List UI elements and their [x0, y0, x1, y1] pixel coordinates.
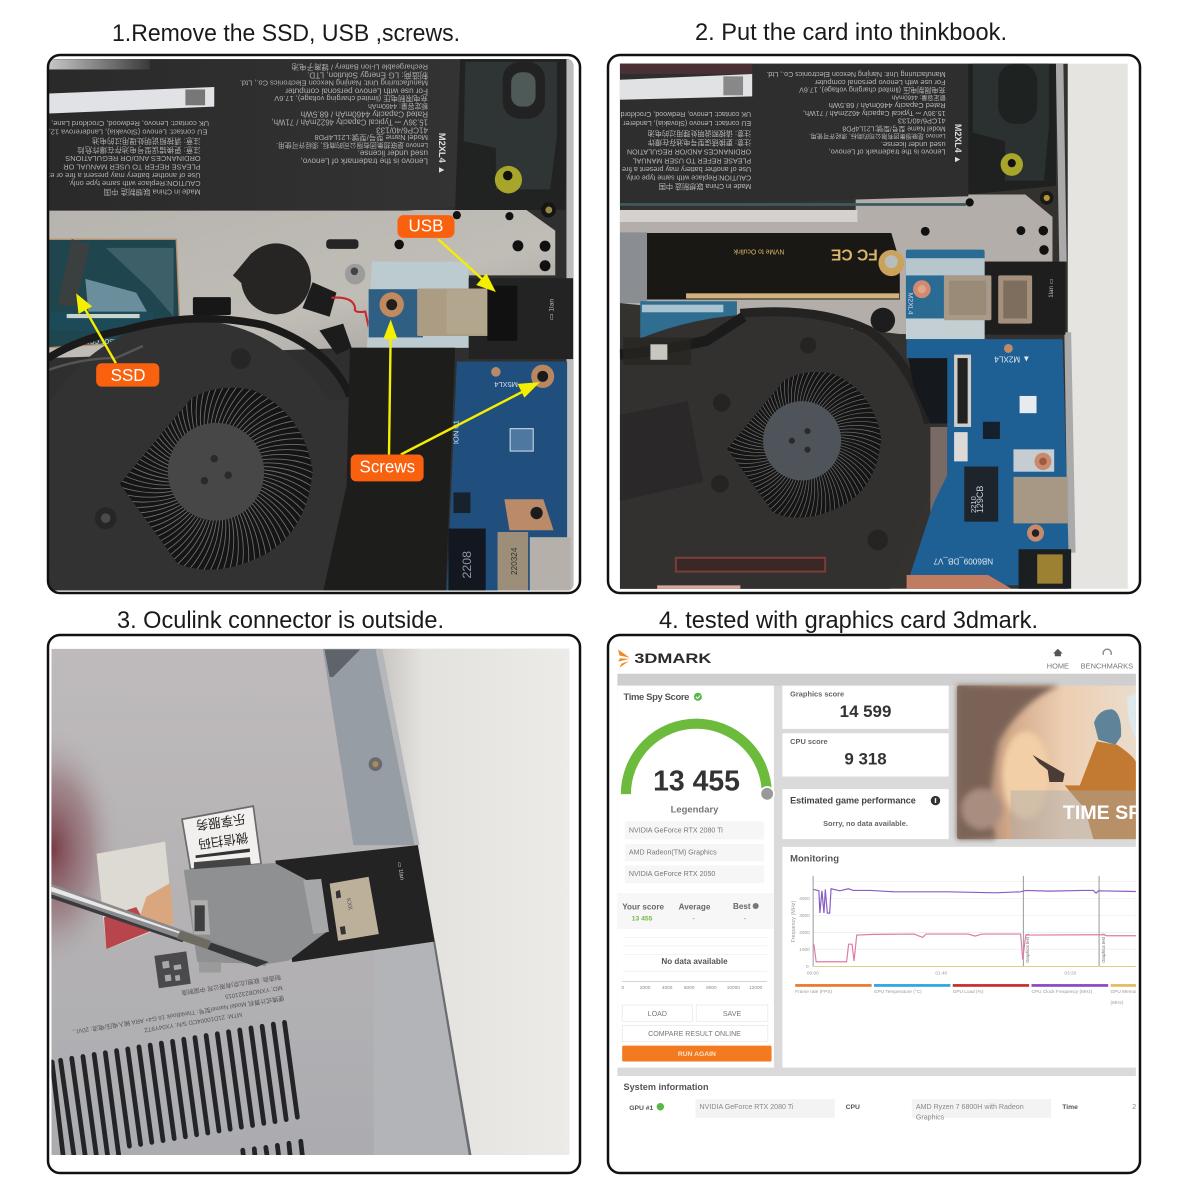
battery pack: 15.36V ⎓ Typical Capacity 4622mAh / 71Wh,: [271, 117, 428, 126]
regulatory text upside down: MTM: 21D10004CD S/N: YX04Y9TZ: [143, 1010, 243, 1033]
axis labels: 00:00: [807, 970, 819, 976]
yellow baseline: [813, 965, 1136, 968]
legend labels: [795, 989, 1177, 1006]
laptop bottom cover: [51, 649, 570, 1155]
battery pack: PLEASE REFER TO USER MANUAL OR: [63, 163, 201, 172]
blue motherboard: ION 01: [452, 420, 461, 444]
panel border: step 1: [48, 55, 580, 593]
battery: EU contact: Lenovo (Slovakia), Landerer: [623, 119, 751, 127]
image: Time Spy artwork: TIME SPY: [1063, 802, 1154, 824]
fan blades: [727, 372, 882, 518]
battery pack: UK contact: Lenovo, Redwood, Crockford Lane, Basingstoke: [8, 119, 209, 128]
battery pack: Use of another battery may present a fire or explosion: [23, 171, 201, 180]
callout: USB: [397, 215, 454, 238]
legend bars: [795, 984, 1138, 987]
nav: home: HOME: [1047, 662, 1069, 671]
battery: Model Name 型号/型號:L21L4PD8: [842, 124, 946, 133]
GPU comparison rows: NVIDIA GeForce RTX 2050: [629, 870, 715, 878]
your score row: -: [744, 916, 746, 923]
button: save: [696, 1005, 768, 1021]
blue motherboard: 129CB: [975, 486, 985, 513]
system information: GPU #1: [629, 1105, 654, 1112]
button: load: LOAD: [648, 1010, 667, 1018]
black flex tail and opening: [275, 845, 435, 962]
battery: used under license.: [881, 140, 946, 149]
axis labels: 4000: [799, 896, 810, 902]
system information: Graphics: [916, 1113, 945, 1121]
button: load: [622, 1005, 692, 1021]
screwdriver: [51, 884, 269, 967]
battery: PLEASE REFER TO USER MANUAL: [633, 156, 751, 164]
battery: 15.36V ⎓ Typical Capacity 4622mAh / 71Wh,: [803, 109, 946, 117]
battery: Lenovo is the trademark of Lenovo,: [829, 148, 946, 157]
CPU clock line: [813, 889, 1136, 913]
page background band: [617, 674, 1136, 1076]
regulatory text upside down: [67, 973, 286, 1045]
battery pack: used under license.: [358, 148, 428, 157]
battery pack: 注意: 更换错误型号电池存在爆炸危险: [77, 145, 201, 155]
legend labels: CPU Clock Frequency (MHz): [1031, 989, 1093, 995]
card: estimated game performance: [782, 789, 949, 839]
small daughter board with USB connector: ▭ 1lan: [549, 299, 556, 320]
ribbon cable: [908, 358, 948, 424]
teal cable board under M.2: [640, 301, 737, 339]
battery pack: 额定容量: 4460mAh: [368, 102, 428, 111]
card: monitoring chart: Graphics test 2: [1101, 933, 1106, 963]
card: Time Spy score: [617, 686, 774, 1068]
callout arrows, yellow: [76, 239, 540, 455]
card: CPU score: CPU score: [790, 737, 828, 746]
3DMark logo: 3DMARK: [634, 651, 712, 667]
blue motherboard: 2210: [969, 496, 978, 513]
black flex tail and opening: ▭ 1lan: [396, 862, 405, 881]
panel border: step 3: [48, 635, 580, 1173]
battery pack: EU contact: Lenovo (Slovakia), Landererova 12, Bratislava: [13, 128, 207, 137]
blue motherboard: M5XL4: [494, 380, 518, 389]
marker lines: [813, 876, 1099, 967]
battery: Made in China 联想制造 中国: [659, 182, 751, 191]
score distribution, no data: [622, 937, 767, 991]
system information: [610, 1076, 1136, 1127]
battery: [620, 64, 968, 207]
battery: Lenovo 是联想集团有限公司的商标, 须经许可使用.: [809, 132, 946, 140]
M.2 slot area, teal board: Sensor conn: [80, 337, 129, 347]
battery pack: Made in China 联想制造 中国: [104, 187, 201, 197]
battery: 注意: 更换错误型号电池存在爆炸: [648, 138, 751, 147]
your score row: [617, 893, 774, 929]
battery pack: ORDINANCES AND/OR REGULATIONS: [65, 154, 201, 163]
M.2 adapter card with gold markings: FC CE: [831, 246, 878, 263]
legend labels: GPU Memory Clock Frequency: [1111, 989, 1177, 995]
title: step 1: 1.Remove the SSD, USB ,screws.: [112, 20, 460, 47]
panel: step 2 photo, card installed in laptop: [608, 55, 1140, 593]
card: graphics score: Graphics score: [790, 689, 844, 698]
battery pack: [8, 59, 460, 211]
blue motherboard: [447, 362, 571, 594]
your score row: Average: [679, 902, 711, 911]
coin cell battery: [193, 243, 369, 327]
your score row: -: [693, 916, 695, 923]
axis labels: [791, 896, 1077, 976]
system information: 2: [1132, 1103, 1136, 1111]
blue motherboard: 220324: [510, 547, 519, 575]
QR sticker with Chinese text: 微信扫码: [197, 830, 249, 851]
overlay band: [1011, 790, 1136, 839]
GPU comparison rows: NVIDIA GeForce RTX 2080 Ti: [629, 827, 723, 835]
battery: 41CP6/40/133: [898, 117, 946, 126]
chassis screw: [369, 757, 382, 771]
battery: For use with Lenovo personal computer: [814, 78, 946, 87]
Oculink connector: [330, 877, 379, 941]
nav: benchmarks: BENCHMARKS: [1081, 662, 1133, 671]
M.2 adapter card with gold markings: NVMe to Oculink: [733, 248, 784, 255]
plate screw holes: [394, 211, 551, 271]
axis labels: 1000: [799, 947, 810, 953]
character: [1065, 741, 1136, 839]
battery pack: Lenovo 是联想集团有限公司的商标, 须经许可使用.: [276, 141, 428, 150]
callout: SSD: [96, 363, 159, 387]
daughter board: [906, 250, 991, 339]
battery pack: Manufacturing Unit: Nanjing Nexcon Electronics Co., Ltd.: [240, 78, 428, 88]
battery: Use of another battery may present a fire: [622, 165, 751, 173]
your score row: Best: [733, 902, 751, 911]
battery: 额定容量: 4460mAh: [891, 93, 946, 101]
battery pack: CAUTION:Replace with same type only.: [69, 179, 201, 188]
axis labels: 0: [806, 964, 809, 970]
battery pack: For use with Lenovo personal computer: [285, 86, 428, 95]
blue motherboard: 2208: [460, 551, 474, 578]
battery pack: 41CP6/40/133: [376, 125, 428, 134]
battery: Manufacturing Unit: Nanjing Nexcon Electronics Co., Ltd.: [766, 70, 946, 78]
blue motherboard: NB6009_DB_V7: [933, 556, 993, 566]
GPU clock line: [814, 934, 1136, 962]
panel: step 1 photo, laptop interior with callouts: [49, 59, 574, 590]
score distribution, no data: 2000: [640, 985, 651, 991]
fan housing: [620, 300, 943, 592]
M.2 slot area, teal board: [48, 239, 180, 348]
panel border: step 2: [608, 55, 1140, 593]
small daughter board with USB connector: [367, 262, 573, 359]
system information: System information: [624, 1082, 709, 1092]
your score row: 13 455: [632, 916, 653, 923]
battery pack: Lenovo is the trademark of Lenovo,: [301, 156, 428, 165]
card: monitoring chart: [782, 847, 1177, 1068]
title: step 3: 3. Oculink connector is outside.: [117, 607, 444, 634]
QR sticker with Chinese text: 乐享服务: [194, 811, 246, 833]
battery: M2XL4 ▲: [953, 124, 963, 164]
card: graphics score: [782, 686, 949, 729]
grid: [813, 882, 1136, 949]
battery pack: Rated Capacity 4460mAh / 68.5Wh: [300, 109, 428, 119]
metal chassis plate: [48, 210, 555, 358]
button: compare: COMPARE RESULT ONLINE: [648, 1030, 741, 1038]
callout: Screws: [351, 455, 424, 481]
battery pack: Rechargeable Li-Ion Battery / 锂离子电池: [291, 63, 428, 73]
image: Time Spy artwork: [957, 686, 1154, 839]
fan housing: [49, 315, 352, 570]
system information: NVIDIA GeForce RTX 2080 Ti: [700, 1103, 794, 1111]
regulatory text upside down: 便携式计算机 Model Name/型号: ThinkBook 16 G4+ ARA 输入电压/电流: 20V/...: [71, 994, 285, 1036]
blue motherboard: [907, 339, 1071, 589]
battery: 充电限制电压 (limited charging voltage), 17.6V: [799, 85, 946, 94]
legend labels: GPU Temperature (°C): [874, 989, 922, 995]
score gauge: [626, 724, 774, 801]
holographic sticker: [97, 842, 174, 949]
score distribution, no data: No data available: [661, 957, 728, 966]
photo area: [620, 64, 1128, 592]
speaker: [455, 58, 569, 218]
laptop right edge: [1056, 64, 1067, 262]
cooling vents: [52, 1022, 302, 1157]
system information: AMD Ryzen 7 6800H with Radeon: [916, 1103, 1024, 1111]
axis labels: 01:40: [935, 970, 948, 976]
title: step 2: 2. Put the card into thinkbook.: [695, 19, 1007, 46]
card: Time Spy score: Time Spy Score: [624, 692, 689, 703]
card: Time Spy score: Legendary: [671, 805, 719, 816]
black flex section: [985, 262, 1065, 335]
score distribution, no data: 10000: [727, 985, 740, 991]
Oculink connector: KXK: [345, 898, 354, 912]
QR sticker with Chinese text: [182, 806, 261, 869]
system information: Time: [1062, 1104, 1078, 1111]
score distribution, no data: 0: [622, 985, 625, 991]
score distribution, no data: 6000: [684, 985, 695, 991]
battery: Rated Capacity 4460mAh / 68.5Wh: [829, 101, 946, 110]
panel: step 3 photo, Oculink connector outside the case: [51, 648, 570, 1155]
axis labels: Frequency (MHz): [791, 901, 797, 943]
battery pack: 制造商: LG Energy Solution, LTD.: [307, 71, 428, 81]
battery: CAUTION:Replace with same type only.: [625, 174, 751, 182]
legend labels: (MHz): [1111, 1000, 1124, 1006]
card: graphics score: 14 599: [840, 702, 891, 721]
grey plastic bracket: [184, 863, 329, 973]
button: compare: [622, 1025, 768, 1042]
speaker grille dots: [325, 649, 360, 677]
battery: UK contact: Lenovo, Redwood, Crockford: [620, 110, 751, 118]
second oculink connector: [998, 275, 1032, 324]
axis labels: 3000: [799, 913, 810, 919]
callout: Screws: Screws: [360, 457, 415, 476]
battery pack: 注意: 请按照说明处理用过的电池: [92, 136, 201, 146]
GPU comparison rows: AMD Radeon(TM) Graphics: [629, 849, 717, 857]
title: step 4: 4. tested with graphics card 3dmark.: [659, 607, 1038, 634]
card: estimated game performance: Estimated game performance: [790, 796, 916, 806]
metal plate: [620, 194, 1052, 334]
your score row: Your score: [622, 902, 664, 911]
speaker: [968, 64, 1056, 205]
legend labels: GPU Load (%): [953, 989, 984, 995]
button: run again: RUN AGAIN: [678, 1051, 716, 1058]
legend labels: Frame rate (FPS): [795, 989, 832, 995]
system information: CPU: [846, 1104, 860, 1111]
laptop side strip: [323, 649, 418, 845]
fan blades: [120, 388, 312, 570]
battery pack: Model Name 型号/型號:L21L4PD8: [314, 133, 428, 143]
battery: ORDINANCES AND/OR REGULATION: [627, 148, 751, 156]
callout: USB: USB: [409, 216, 443, 235]
regulatory text upside down: MO: YXNOB2321015: [224, 984, 283, 1000]
panel border: step 4: [608, 635, 1140, 1173]
nav: home: [1047, 649, 1069, 671]
button: save: SAVE: [723, 1010, 741, 1018]
laptop edge strip: [566, 55, 574, 593]
black insulating film: [323, 348, 455, 593]
QR code: [154, 951, 191, 988]
button: run again: [622, 1046, 772, 1061]
battery: 注意: 请按照说明处理用过的电池: [648, 129, 751, 138]
photo area: 1lan ▭: [1048, 278, 1055, 298]
callout: SSD: SSD: [111, 366, 146, 385]
score distribution, no data: 8000: [706, 985, 717, 991]
card: Time Spy score: 13 455: [653, 765, 740, 797]
white wall background: [382, 649, 570, 1155]
card: CPU score: [782, 733, 949, 777]
nav: benchmarks: [1081, 649, 1133, 671]
plate holes: [921, 198, 1049, 255]
battery pack: M2XL4 ▲: [437, 133, 447, 175]
card: monitoring chart: Monitoring: [790, 854, 839, 865]
panel: step 4, 3DMark Time Spy result: [608, 635, 1177, 1173]
card: estimated game performance: Sorry, no data available.: [823, 819, 908, 828]
card: monitoring chart: Graphics test 1: [1025, 933, 1030, 963]
3DMark logo: [618, 649, 712, 668]
battery pack: 充电限制电压 (limited charging voltage), 17.6V: [274, 94, 428, 104]
score distribution, no data: 12000: [749, 985, 763, 991]
axis labels: 2000: [799, 930, 810, 936]
card: CPU score: 9 318: [844, 750, 887, 769]
score distribution, no data: 4000: [662, 985, 673, 991]
regulatory text upside down: 制造商: 联想(北京)有限公司 中国制造: [181, 973, 281, 997]
GPU comparison rows: [625, 822, 764, 883]
daughter board: M2XL4: [906, 293, 913, 315]
axis labels: 03:20: [1064, 970, 1077, 976]
blue motherboard: ▲ M2XL4: [994, 354, 1030, 363]
M.2 adapter card with gold markings: [647, 233, 904, 300]
